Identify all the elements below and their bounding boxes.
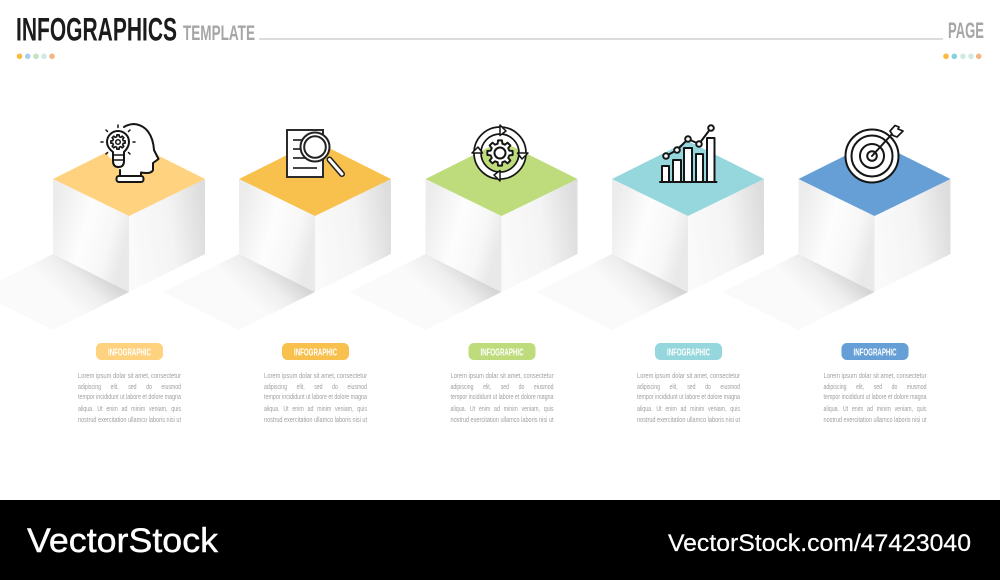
footer bar [0, 500, 1000, 580]
step 5 label and text: INFOGRAPHIC [854, 348, 896, 358]
step 1 label and text: INFOGRAPHIC [108, 348, 151, 358]
left dots [17, 54, 55, 59]
icon: document with magnifier [287, 130, 342, 177]
step 3 label and text: tempor incididunt ut labore et dolore magna [450, 394, 554, 401]
step 5 label and text [824, 343, 927, 424]
footer bar: VectorStock.com/47423040 [668, 530, 971, 557]
step 4 label and text: tempor incididunt ut labore et dolore magna [637, 394, 740, 401]
step 4 label and text: Lorem ipsum dolar sit amet, consectetur [637, 373, 741, 380]
cube 5 [722, 141, 950, 330]
cube 2 [163, 141, 391, 330]
step 5 label and text: aliqua. Ut enim ad minim veniam, quis [824, 406, 927, 413]
cube 4 [536, 141, 764, 330]
icon: gear with circular arrows [472, 125, 528, 181]
step 2 label and text: Lorem ipsum dolar sit amet, consectetur [264, 373, 368, 380]
cube 3 [350, 141, 578, 330]
step 4 label and text: adipiscing elit, sed do eiusmod [637, 384, 740, 391]
title: INFOGRAPHICS [16, 12, 177, 48]
title: TEMPLATE [183, 22, 255, 45]
right dots [943, 54, 982, 59]
step 5 label and text: Lorem ipsum dolar sit amet, consectetur [824, 373, 927, 380]
step 1 label and text: nostrud exercitation ullamco laboris nisi ut [78, 417, 181, 424]
icon: head with light bulb [101, 124, 158, 182]
cube 1 [0, 141, 205, 330]
step 2 label and text: adipiscing elit, sed do eiusmod [264, 384, 367, 391]
step 3 label and text: INFOGRAPHIC [480, 348, 524, 358]
step 2 label and text: nostrud exercitation ullamco laboris nisi ut [264, 417, 367, 424]
step 3 label and text: aliqua. Ut enim ad minim veniam, quis [450, 406, 554, 413]
step 1 label and text: adipiscing elit, sed do eiusmod [78, 384, 181, 391]
header rule [259, 38, 943, 40]
step 3 label and text [450, 343, 554, 424]
icon: target with arrow [846, 126, 903, 182]
step 2 label and text: tempor incididunt ut labore et dolore magna [264, 394, 367, 401]
step 5 label and text: adipiscing elit, sed do eiusmod [824, 384, 927, 391]
step 2 label and text: INFOGRAPHIC [294, 348, 337, 358]
step 4 label and text [637, 343, 741, 424]
step 1 label and text: aliqua. Ut enim ad minim veniam, quis [78, 406, 181, 413]
step 4 label and text: nostrud exercitation ullamco laboris nisi ut [637, 417, 740, 424]
step 1 label and text: tempor incididunt ut labore et dolore magna [78, 394, 181, 401]
step 5 label and text: tempor incididunt ut labore et dolore magna [824, 394, 927, 401]
footer bar: VectorStock [27, 522, 219, 560]
step 4 label and text: INFOGRAPHIC [667, 348, 710, 358]
step 3 label and text: nostrud exercitation ullamco laboris nisi ut [450, 417, 554, 424]
step 1 label and text: Lorem ipsum dolar sit amet, consectetur [78, 373, 182, 380]
icon: bar chart with trend line [660, 125, 716, 182]
step 1 label and text [78, 343, 182, 424]
step 3 label and text: adipiscing elit, sed do eiusmod [450, 384, 554, 391]
step 2 label and text [264, 343, 368, 424]
step 4 label and text: aliqua. Ut enim ad minim veniam, quis [637, 406, 740, 413]
step 3 label and text: Lorem ipsum dolar sit amet, consectetur [450, 373, 554, 380]
step 2 label and text: aliqua. Ut enim ad minim veniam, quis [264, 406, 367, 413]
step 5 label and text: nostrud exercitation ullamco laboris nisi ut [824, 417, 927, 424]
